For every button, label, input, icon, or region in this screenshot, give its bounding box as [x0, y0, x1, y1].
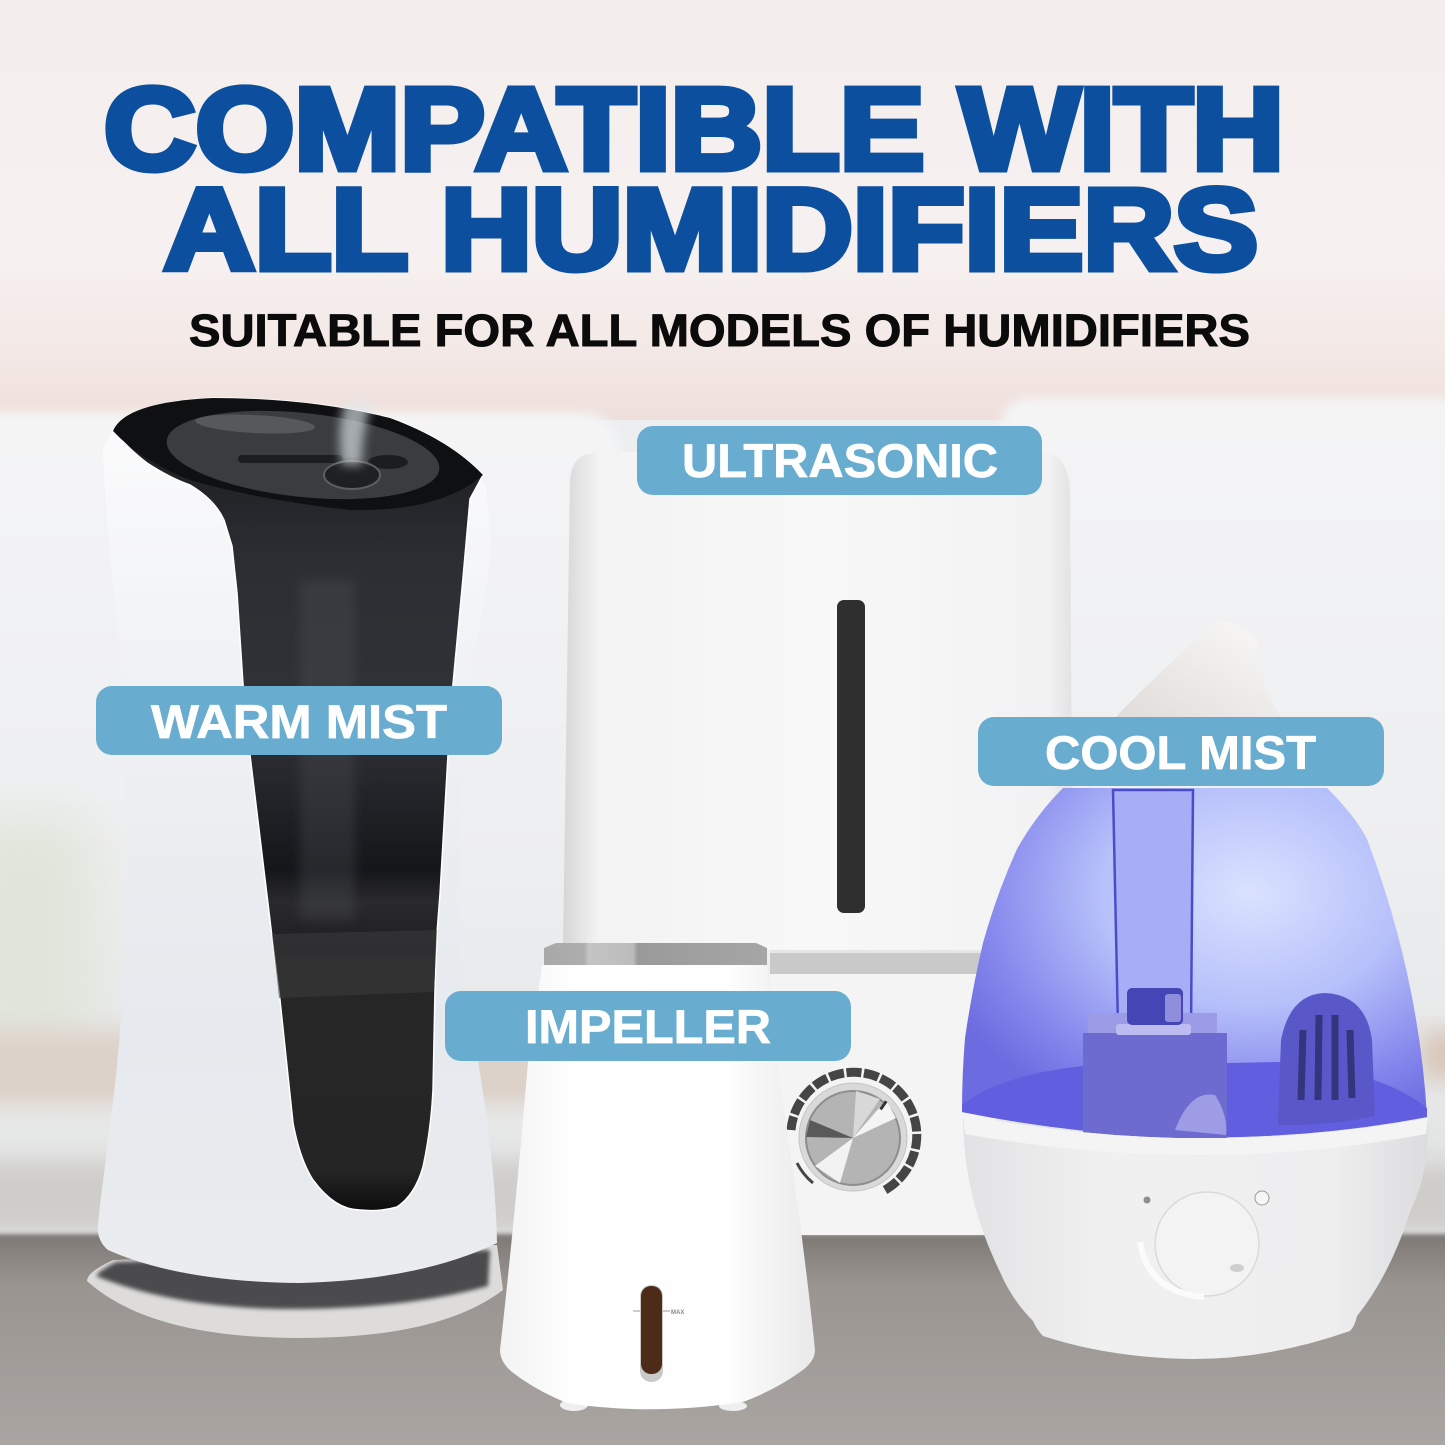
- valve: [1083, 988, 1227, 1138]
- nozzle: [324, 461, 380, 489]
- label: warm mist: WARM MIST: [151, 695, 447, 748]
- label: cool mist: COOL MIST: [1045, 726, 1316, 779]
- label: cool mist: [978, 717, 1384, 786]
- base disc: [87, 1245, 503, 1338]
- humidifier: ultrasonic: [563, 452, 1073, 1235]
- label: warm mist: [96, 686, 502, 755]
- label: ultrasonic: [637, 426, 1042, 495]
- title: COMPATIBLE WITH: [104, 64, 1284, 194]
- top cap: [113, 398, 483, 510]
- white cone top: [1115, 620, 1281, 718]
- base rim: [963, 1115, 1428, 1155]
- white base: [963, 1115, 1428, 1359]
- humidifier: impeller: [500, 943, 815, 1411]
- disc shadow: [96, 1250, 490, 1309]
- water band: [272, 930, 437, 998]
- humidifier: cool mist: [962, 620, 1428, 1359]
- max mark: [633, 1310, 684, 1316]
- dial: [791, 1072, 917, 1191]
- tube: [1113, 790, 1193, 1028]
- max mark: MAX: [671, 1310, 684, 1316]
- level window: [640, 1285, 663, 1382]
- base dial: [1140, 1191, 1269, 1297]
- subtitle: SUITABLE FOR ALL MODELS OF HUMIDIFIERS: [189, 305, 1250, 356]
- dark window: [113, 398, 483, 1211]
- title: ALL HUMIDIFIERS: [164, 166, 1258, 294]
- feet: [560, 1399, 747, 1411]
- mist: [340, 402, 372, 465]
- humidifier: warm mist: [87, 398, 503, 1338]
- level window: [837, 600, 865, 913]
- white shell: [98, 431, 497, 1283]
- body: [500, 965, 815, 1409]
- label: impeller: IMPELLER: [525, 1000, 771, 1053]
- filter cap: [1278, 993, 1375, 1125]
- title: [104, 64, 1284, 294]
- cap oval: [162, 399, 444, 511]
- label: ultrasonic: ULTRASONIC: [682, 434, 998, 487]
- water: [962, 1062, 1427, 1137]
- body: [563, 452, 1073, 950]
- inner tube reflection: [300, 580, 355, 920]
- blue tank: [962, 788, 1427, 1137]
- label: impeller: [445, 991, 851, 1061]
- lid: [544, 943, 767, 965]
